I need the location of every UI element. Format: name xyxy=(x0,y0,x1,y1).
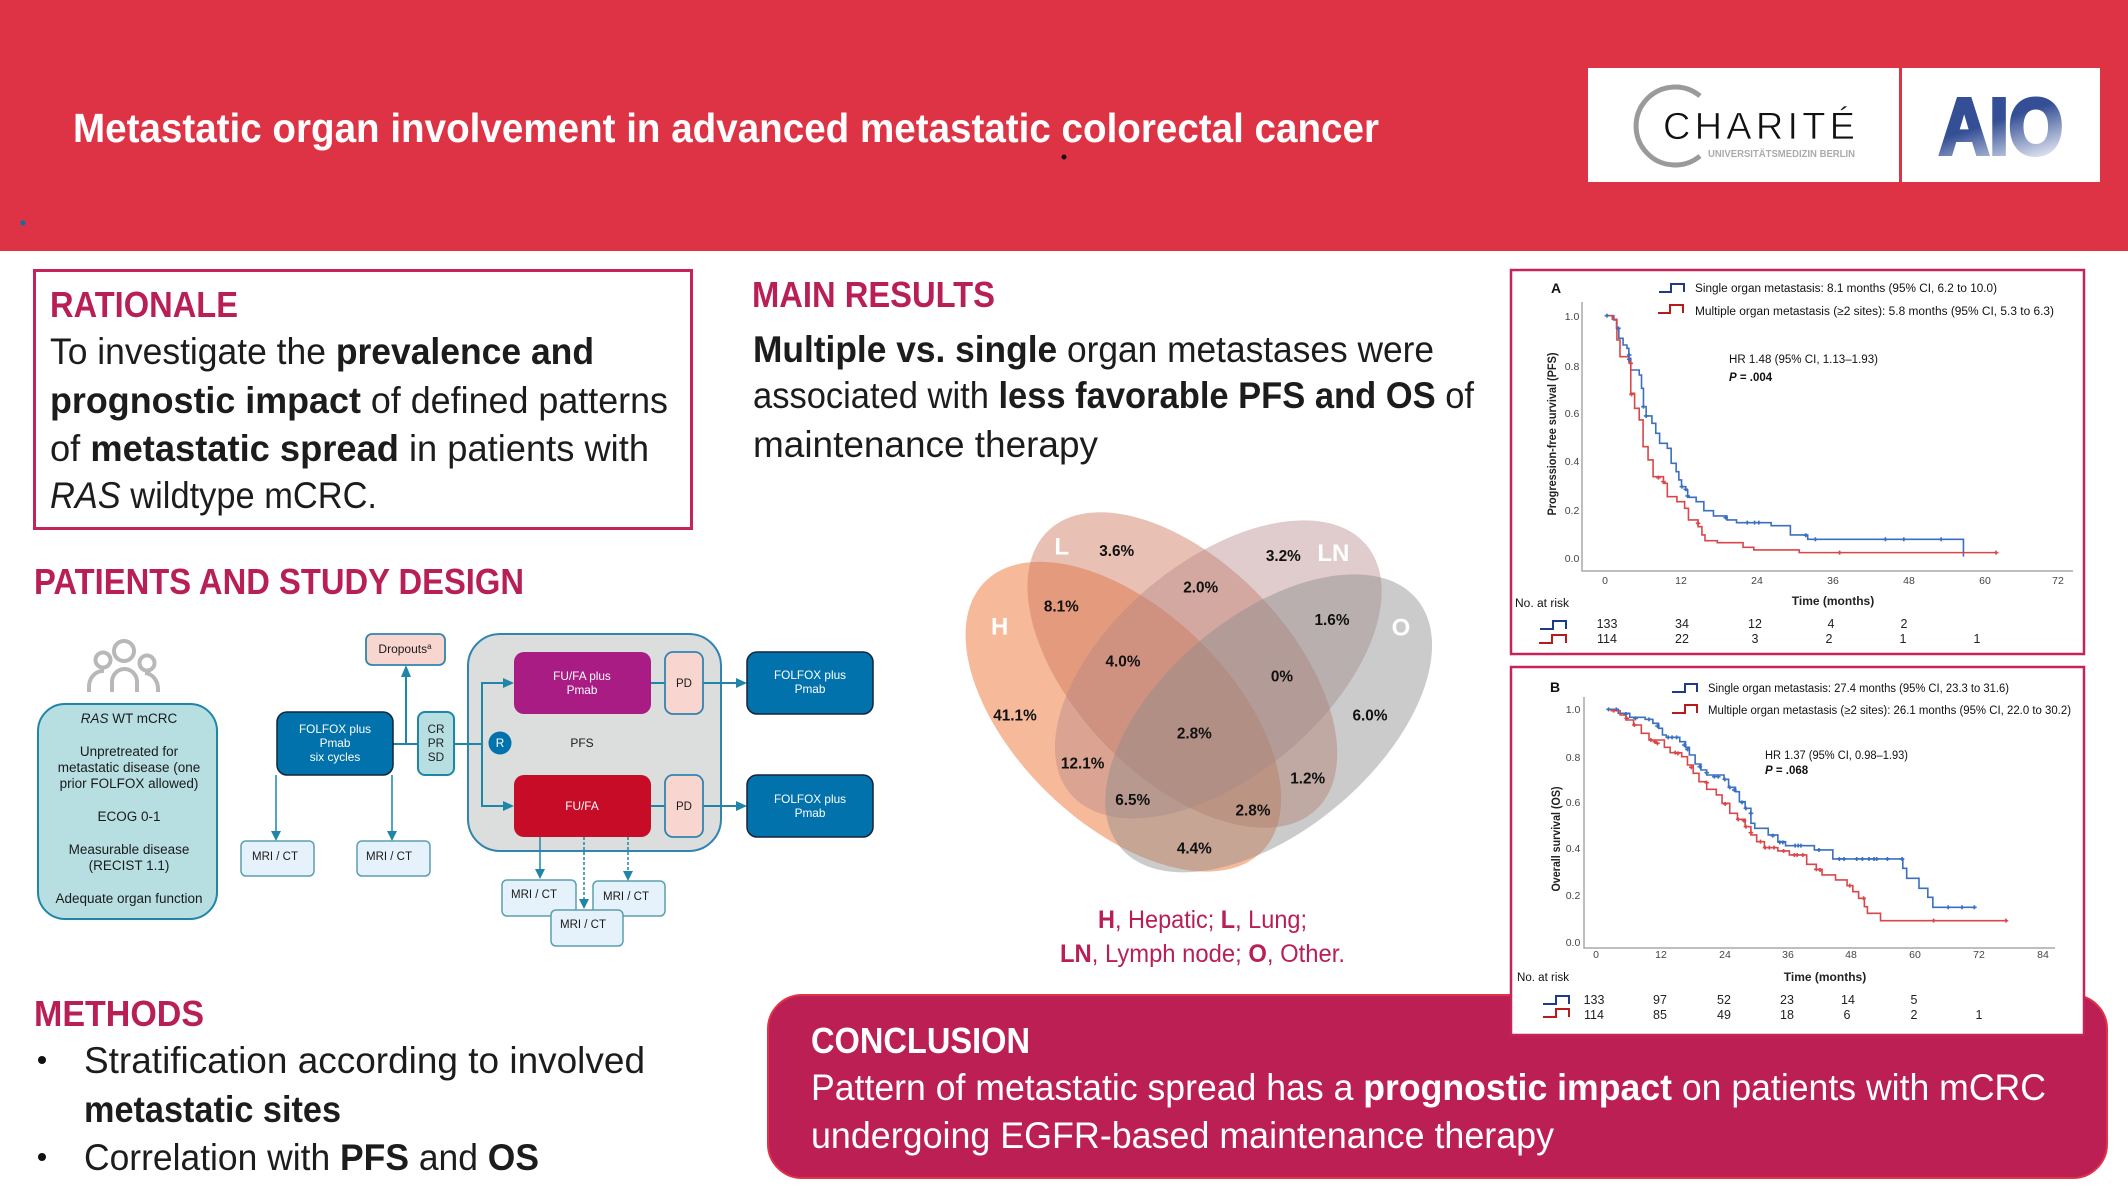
panel: randomized maintenance xyxy=(468,634,721,851)
chart: PFS Kaplan-Meier (panel A): 0.0 xyxy=(1565,553,1579,565)
number at risk: panel B: 52 xyxy=(1717,993,1731,1007)
chart: OS Kaplan-Meier (panel B): 0.4 xyxy=(1566,843,1580,855)
study design flow diagram xyxy=(38,634,873,946)
venn legend: H, Hepatic; L, Lung; xyxy=(1098,906,1307,934)
chart: PFS Kaplan-Meier (panel A): 0.8 xyxy=(1565,361,1579,373)
chart: PFS Kaplan-Meier (panel A): 0.6 xyxy=(1565,408,1579,420)
number at risk: panel A: 1 xyxy=(1974,632,1981,646)
chart: OS Kaplan-Meier (panel B): 24 xyxy=(1719,949,1731,961)
venn diagram: 3.6% xyxy=(1099,543,1135,560)
number at risk: panel B xyxy=(1543,993,1983,1022)
arrow: to dropouts xyxy=(393,665,418,744)
legend: panel B: Single organ metastasis: 27.4 months (95% CI, 23.3 to 31.6) xyxy=(1708,683,2009,695)
number at risk: panel A: 114 xyxy=(1597,632,1617,646)
number at risk: panel B: 85 xyxy=(1653,1008,1667,1022)
chart: PFS Kaplan-Meier (panel A): HR 1.48 (95% CI, 1.13–1.93) xyxy=(1729,354,1878,366)
number at risk: panel A: 22 xyxy=(1675,632,1689,646)
chart: OS Kaplan-Meier (panel B): 0.6 xyxy=(1566,797,1580,809)
number at risk: panel B: 6 xyxy=(1844,1008,1851,1022)
box: MRI CT 3 xyxy=(502,880,576,916)
box: induction therapy: six cycles xyxy=(310,750,360,764)
title: Metastatic organ involvement in advanced metastatic colorectal cancer xyxy=(73,105,1379,151)
venn diagram xyxy=(910,456,1486,930)
chart: PFS Kaplan-Meier (panel A): 36 xyxy=(1827,575,1839,587)
box: progression bottom: PD xyxy=(676,801,692,813)
box: dropouts: Dropouts xyxy=(378,642,427,656)
number at risk: panel B: 5 xyxy=(1911,993,1918,1007)
chart: OS Kaplan-Meier (panel B): P = .068 xyxy=(1765,765,1809,777)
legend: panel A: Single organ metastasis: 8.1 months (95% CI, 6.2 to 10.0) xyxy=(1695,283,1997,295)
venn diagram: LN xyxy=(1317,540,1349,567)
venn diagram: 8.1% xyxy=(1044,599,1079,616)
chart: PFS Kaplan-Meier (panel A): 0.4 xyxy=(1565,456,1579,468)
arrows: randomization xyxy=(454,678,514,811)
box: MRI CT 1 xyxy=(241,841,314,876)
number at risk: panel A: 3 xyxy=(1752,632,1759,646)
box: MRI CT 4 xyxy=(593,881,665,916)
chart: OS Kaplan-Meier (panel B): No. at risk xyxy=(1517,972,1569,984)
number at risk: panel B: 1 xyxy=(1976,1008,1983,1022)
chart: PFS Kaplan-Meier (panel A): 72 xyxy=(2052,575,2064,587)
panel: main results: Multiple vs. single organ metastases were xyxy=(753,329,1434,370)
box: MRI CT 5 xyxy=(551,910,623,946)
venn diagram: H xyxy=(991,613,1008,640)
box: progression top xyxy=(665,652,703,714)
heading: patients and study design: PATIENTS AND STUDY DESIGN xyxy=(34,561,524,602)
panel: methods: Stratification according to involved xyxy=(84,1040,645,1081)
box: response: SD xyxy=(428,750,444,764)
panel: methods: Correlation with PFS and OS xyxy=(84,1137,539,1178)
survival curves: panel A xyxy=(1605,314,1998,557)
chart: OS Kaplan-Meier (panel B): 48 xyxy=(1845,949,1857,961)
box: response xyxy=(418,712,454,775)
box: MRI CT 1: MRI / CT xyxy=(252,851,298,863)
box: induction therapy: Pmab xyxy=(320,736,351,750)
chart: PFS Kaplan-Meier (panel A): 48 xyxy=(1903,575,1915,587)
box: reinduction top xyxy=(747,652,873,714)
arrows: maintenance scans xyxy=(535,837,633,909)
panel: methods xyxy=(34,993,645,1178)
chart: OS Kaplan-Meier (panel B): HR 1.37 (95% CI, 0.98–1.93) xyxy=(1765,750,1908,762)
number at risk: panel A: 2 xyxy=(1901,617,1908,631)
box: MRI CT 2: MRI / CT xyxy=(366,851,412,863)
chart: OS Kaplan-Meier (panel B): 84 xyxy=(2037,949,2049,961)
chart: OS Kaplan-Meier (panel B): Overall survival (OS) xyxy=(1549,786,1563,892)
box: dropouts: a xyxy=(427,642,432,651)
panel: conclusion: CONCLUSION xyxy=(811,1020,1030,1061)
number at risk: panel B: 18 xyxy=(1780,1008,1794,1022)
panel: rationale: prognostic impact of defined patterns xyxy=(50,380,668,421)
chart: PFS Kaplan-Meier (panel A): P = .004 xyxy=(1729,372,1773,384)
chart: OS Kaplan-Meier (panel B): 36 xyxy=(1782,949,1794,961)
chart: OS Kaplan-Meier (panel B): 72 xyxy=(1973,949,1985,961)
legend: panel A: Multiple organ metastasis (≥2 sites): 5.8 months (95% CI, 5.3 to 6.3) xyxy=(1695,306,2054,318)
box: reinduction bottom: Pmab xyxy=(795,806,826,820)
panel: methods: metastatic sites xyxy=(84,1089,341,1130)
panel: randomized maintenance: PFS xyxy=(570,736,594,750)
eligibility criteria box: metastatic disease (one xyxy=(58,760,200,775)
panel: main results: associated with less favorable PFS and OS of xyxy=(753,375,1475,416)
venn diagram: 2.8% xyxy=(1236,803,1271,820)
box: dropouts xyxy=(366,634,445,665)
venn diagram: 6.5% xyxy=(1115,792,1151,809)
chart: OS Kaplan-Meier (panel B): B xyxy=(1550,679,1560,695)
number at risk: panel A xyxy=(1539,617,1981,646)
arm: FU/FA xyxy=(514,775,651,837)
panel: rationale xyxy=(34,270,692,528)
venn diagram: 2.0% xyxy=(1183,579,1219,596)
panel: conclusion: undergoing EGFR-based maintenance therapy xyxy=(811,1115,1554,1156)
chart: OS Kaplan-Meier (panel B) xyxy=(1511,667,2084,1035)
legend: panel B xyxy=(1672,683,2071,717)
chart: OS Kaplan-Meier (panel B): Time (months) xyxy=(1784,970,1866,984)
box: induction therapy: FOLFOX plus xyxy=(299,722,371,736)
box: response: PR xyxy=(428,736,444,750)
panel: conclusion xyxy=(768,995,2107,1178)
number at risk: panel A: 12 xyxy=(1748,617,1762,631)
number at risk: panel A: 2 xyxy=(1826,632,1833,646)
number at risk: panel A: 4 xyxy=(1828,617,1835,631)
eligibility criteria box: ECOG 0-1 xyxy=(97,809,161,824)
number at risk: panel B: 97 xyxy=(1653,993,1667,1007)
icon: randomization: R xyxy=(496,736,504,750)
panel: methods: METHODS xyxy=(34,993,204,1034)
number at risk: panel B: 133 xyxy=(1584,993,1604,1007)
chart: PFS Kaplan-Meier (panel A): 60 xyxy=(1979,575,1991,587)
box: progression top: PD xyxy=(676,678,692,690)
venn diagram: 2.8% xyxy=(1177,725,1212,742)
arm: FU/FA: FU/FA xyxy=(565,799,599,813)
chart: PFS Kaplan-Meier (panel A): 0.2 xyxy=(1565,505,1579,517)
logo: AIO: AIO xyxy=(1939,82,2063,171)
chart: PFS Kaplan-Meier (panel A): 24 xyxy=(1751,575,1763,587)
arm: FU/FA plus Pmab xyxy=(514,652,651,714)
legend: panel B: Multiple organ metastasis (≥2 sites): 26.1 months (95% CI, 22.0 to 30.2) xyxy=(1708,705,2071,717)
box: reinduction top: FOLFOX plus xyxy=(774,668,846,682)
eligibility criteria box: RAS WT mCRC xyxy=(81,711,177,726)
chart: PFS Kaplan-Meier (panel A): 1.0 xyxy=(1565,311,1579,323)
eligibility criteria box: (RECIST 1.1) xyxy=(89,858,169,873)
eligibility criteria box: Adequate organ function xyxy=(55,891,203,906)
venn diagram: 41.1% xyxy=(993,708,1037,725)
header banner xyxy=(0,0,2128,251)
venn diagram: 1.6% xyxy=(1315,612,1350,629)
panel: main results: maintenance therapy xyxy=(753,424,1098,465)
chart: PFS Kaplan-Meier (panel A): 0 xyxy=(1602,575,1608,587)
box: MRI CT 3: MRI / CT xyxy=(511,889,557,901)
number at risk: panel B: 23 xyxy=(1780,993,1794,1007)
chart: OS Kaplan-Meier (panel B): 12 xyxy=(1655,949,1667,961)
chart: PFS Kaplan-Meier (panel A): No. at risk xyxy=(1515,598,1569,610)
venn diagram: 12.1% xyxy=(1061,755,1105,772)
panel: rationale: RATIONALE xyxy=(50,284,238,325)
panel: rationale: RAS wildtype mCRC. xyxy=(50,475,377,516)
number at risk: panel A: 34 xyxy=(1675,617,1689,631)
chart: PFS Kaplan-Meier (panel A): A xyxy=(1551,280,1561,296)
logo: Charité: CHARITÉ xyxy=(1663,105,1855,148)
eligibility criteria box: Unpretreated for xyxy=(80,744,179,759)
venn diagram: 1.2% xyxy=(1290,770,1326,787)
number at risk: panel B: 14 xyxy=(1841,993,1855,1007)
survival curves: panel B xyxy=(1606,707,2008,923)
logo: Charité: UNIVERSITÄTSMEDIZIN BERLIN xyxy=(1708,147,1855,160)
chart: PFS Kaplan-Meier (panel A) xyxy=(1511,270,2084,654)
venn legend: LN, Lymph node; O, Other. xyxy=(1060,940,1345,968)
icon: patients xyxy=(89,641,158,692)
box: progression bottom xyxy=(665,775,703,837)
venn diagram: O xyxy=(1392,615,1410,642)
venn legend xyxy=(1060,906,1345,968)
venn diagram: 4.0% xyxy=(1106,654,1141,671)
panel: main results: MAIN RESULTS xyxy=(752,274,995,315)
box: reinduction bottom: FOLFOX plus xyxy=(774,792,846,806)
logo: Charité xyxy=(1588,68,1899,182)
chart: OS Kaplan-Meier (panel B): 0.0 xyxy=(1566,937,1580,949)
box: MRI CT 5: MRI / CT xyxy=(560,919,606,931)
panel: main results xyxy=(752,274,1475,465)
chart: OS Kaplan-Meier (panel B): 60 xyxy=(1909,949,1921,961)
number at risk: panel B: 114 xyxy=(1584,1008,1604,1022)
icon: randomization xyxy=(488,732,512,754)
arm: FU/FA plus Pmab: FU/FA plus xyxy=(553,669,611,683)
box: MRI CT 2 xyxy=(357,841,430,876)
logo: AIO xyxy=(1902,68,2100,182)
chart: PFS Kaplan-Meier (panel A): 12 xyxy=(1675,575,1687,587)
chart: PFS Kaplan-Meier (panel A): Progression-free survival (PFS) xyxy=(1545,352,1559,516)
venn diagram: 4.4% xyxy=(1177,840,1212,857)
number at risk: panel A: 1 xyxy=(1900,632,1907,646)
chart: OS Kaplan-Meier (panel B): 0 xyxy=(1593,949,1599,961)
legend: panel A xyxy=(1658,283,2054,318)
eligibility criteria box: prior FOLFOX allowed) xyxy=(60,776,198,791)
arm: FU/FA plus Pmab: Pmab xyxy=(567,683,598,697)
number at risk: panel A: 133 xyxy=(1597,617,1617,631)
chart: OS Kaplan-Meier (panel B): 1.0 xyxy=(1566,704,1580,716)
chart: PFS Kaplan-Meier (panel A): Time (months) xyxy=(1792,594,1874,608)
box: MRI CT 4: MRI / CT xyxy=(603,891,649,903)
eligibility criteria box xyxy=(38,704,217,919)
venn diagram: 0% xyxy=(1271,669,1293,686)
panel: rationale: of metastatic spread in patients with xyxy=(50,428,649,469)
eligibility criteria box: Measurable disease xyxy=(69,842,189,857)
chart: OS Kaplan-Meier (panel B): 0.2 xyxy=(1566,890,1580,902)
venn diagram: 6.0% xyxy=(1353,708,1388,725)
box: response: CR xyxy=(427,722,445,736)
panel: conclusion: Pattern of metastatic spread has a prognostic impact on patients with mCRC xyxy=(811,1067,2046,1108)
venn diagram: 3.2% xyxy=(1266,548,1301,565)
arrows: progression to reinduction xyxy=(651,678,747,811)
box: reinduction bottom xyxy=(747,775,873,837)
number at risk: panel B: 49 xyxy=(1717,1008,1731,1022)
chart: OS Kaplan-Meier (panel B): 0.8 xyxy=(1566,752,1580,764)
box: reinduction top: Pmab xyxy=(795,682,826,696)
arrows: induction scans xyxy=(271,775,397,841)
venn diagram: L xyxy=(1054,533,1069,560)
box: induction therapy xyxy=(277,712,393,775)
number at risk: panel B: 2 xyxy=(1911,1008,1918,1022)
panel: rationale: To investigate the prevalence and xyxy=(50,331,594,372)
